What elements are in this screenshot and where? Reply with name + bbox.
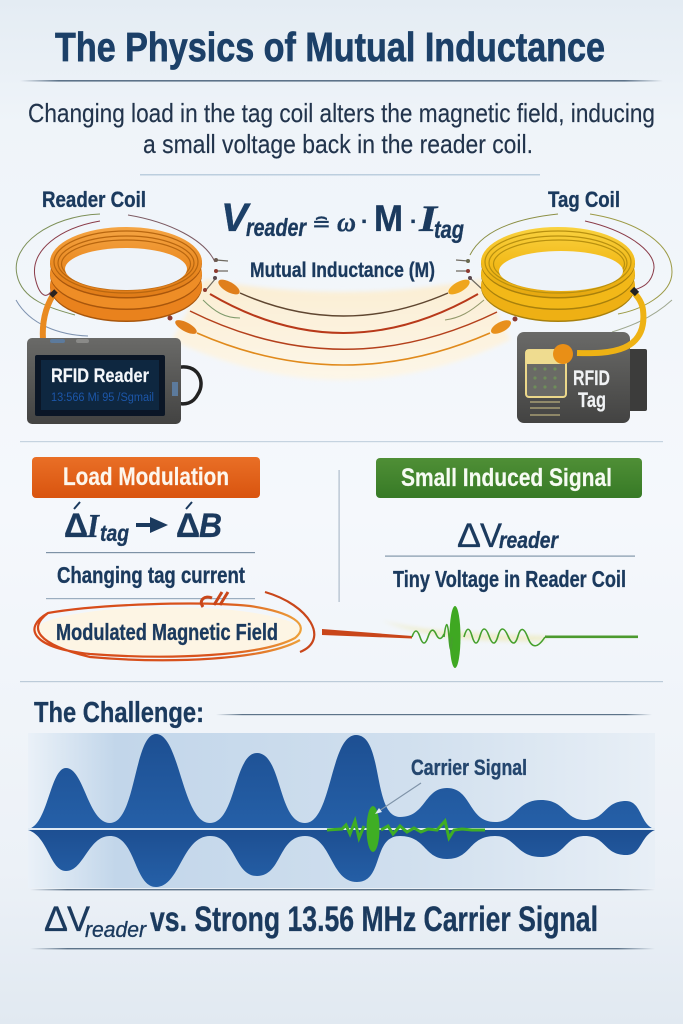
mutual inductance equation: M [374,198,403,239]
small induced signal button: Small Induced Signal [401,464,612,492]
bottom comparison line: reader [85,917,148,942]
arc beads [168,258,518,337]
bottom comparison line: V [67,900,91,939]
small induced signal button [376,458,642,498]
tiny voltage label: Tiny Voltage in Reader Coil [393,566,626,592]
load modulation formula [64,502,222,546]
tag label: RFID [573,367,610,390]
reader coil [43,227,202,340]
bottom comparison line: Δ [44,900,68,939]
reader cable [43,295,53,340]
mutual inductance equation: V [221,196,251,240]
induced signal waveform [322,606,638,668]
load modulation formula: B [199,507,222,545]
reader readout: 13:566 Mi 95 /Sgmail [51,392,154,404]
delta v reader formula: V [480,517,502,555]
intro text: a small voltage back in the reader coil. [143,129,533,159]
delta v reader formula: Δ [457,517,481,555]
tag label [573,367,610,412]
mutual inductance equation: I [418,199,439,240]
tag label: Tag [578,389,606,412]
field arcs between coils [168,258,518,365]
load modulation button [32,457,260,498]
mutual inductance equation: reader [246,214,307,242]
RFID tag device [517,289,647,423]
coil labels: Tag Coil [548,187,620,212]
tag coil field lines [445,214,672,332]
mutual inductance equation: ≘ [312,212,331,237]
the challenge heading: The Challenge: [34,697,204,729]
load modulation button: Load Modulation [63,463,229,491]
load modulation formula: tag [100,520,129,546]
modulated magnetic field [34,592,314,660]
load modulation formula: I [86,508,101,545]
delta v reader formula [457,517,559,555]
mutual inductance field band [172,279,510,380]
tag cable [577,290,643,353]
tag coil [481,227,635,322]
delta v reader formula: reader [499,527,559,553]
mutual inductance equation: · [410,209,417,234]
challenge waveform chart [28,733,655,888]
modulated magnetic field: Modulated Magnetic Field [56,619,278,645]
carrier signal callout: Carrier Signal [411,755,527,780]
intro text [28,98,655,159]
mutual inductance equation: ω [337,207,356,237]
mutual inductance label: Mutual Inductance (M) [250,259,435,282]
reader label: RFID Reader [51,365,149,387]
RFID reader device [27,338,201,424]
panel: small induced signal [322,458,642,668]
bottom comparison line [44,900,598,942]
small signal burst [327,806,485,852]
carrier signal callout [375,755,527,814]
mutual inductance equation: · [361,209,368,234]
changing tag current: Changing tag current [57,562,245,588]
panel: load modulation [32,457,314,660]
mutual inductance equation: tag [434,216,464,244]
load modulation formula: Δ [176,507,200,545]
load modulation formula: Δ [64,507,88,545]
mutual inductance equation [221,196,464,244]
coil labels [42,187,620,212]
reader coil field lines [16,214,240,336]
carrier waveform [28,734,655,887]
coil labels: Reader Coil [42,187,146,212]
tag chip card [526,350,566,397]
